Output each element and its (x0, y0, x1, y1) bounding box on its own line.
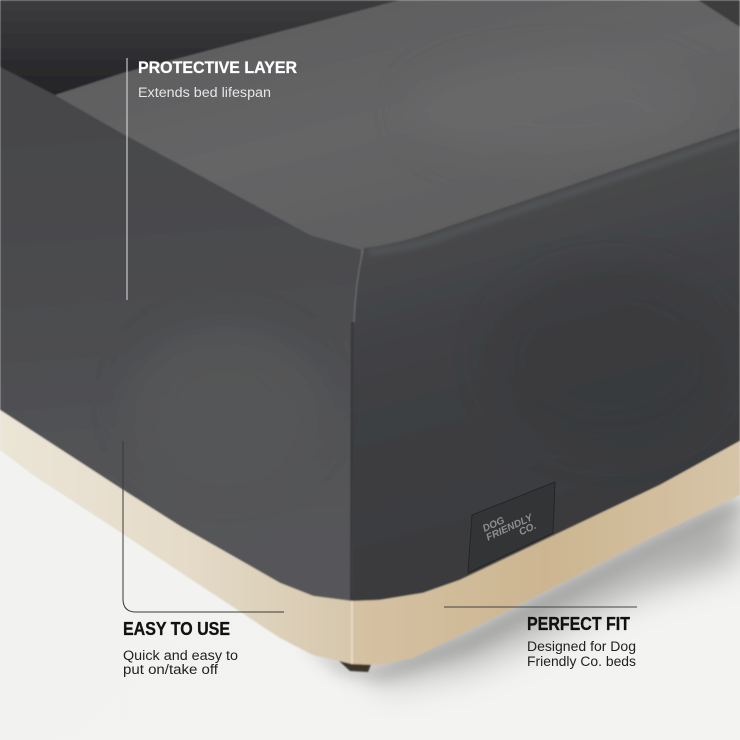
text: extends bed lifespan: Extends bed lifespan (138, 85, 271, 100)
callout line: protective layer (126, 58, 128, 300)
label text: CO. (517, 521, 538, 538)
label text: FRIENDLY (485, 512, 536, 544)
callout line: easy to use (123, 441, 284, 612)
left wall face (0, 67, 362, 602)
back wall (0, 0, 410, 96)
text: quick and easy: put on/take off (123, 662, 218, 677)
callout line: perfect fit (444, 606, 637, 608)
floor shadow near edge (300, 497, 740, 680)
heading: protective layer: PROTECTIVE LAYER (138, 58, 297, 77)
floor shadow right (370, 492, 740, 682)
text: quick and easy (123, 648, 238, 677)
tan corner seam (351, 601, 353, 664)
tan band right (352, 441, 740, 665)
tan band left (0, 410, 352, 664)
back right wall (698, 0, 740, 27)
wall ridge highlight (368, 136, 740, 252)
product label (468, 482, 555, 573)
label text (481, 503, 540, 552)
heading: perfect fit: PERFECT FIT (527, 614, 630, 634)
foot (338, 660, 372, 672)
cushion bright patch (410, 55, 710, 165)
text: designed for: Designed for Dog (527, 639, 636, 654)
seam lower (351, 322, 352, 600)
darker right face mid (490, 270, 730, 450)
heading: easy to use: EASY TO USE (123, 619, 230, 639)
corner seam (354, 250, 363, 322)
text: quick and easy: Quick and easy to (123, 648, 238, 663)
label text: DOG (481, 515, 507, 535)
text: designed for: Friendly Co. beds (527, 654, 636, 669)
right wall face (352, 128, 740, 602)
cushion (55, 0, 740, 252)
text: designed for (527, 639, 636, 669)
light mottling on left face (130, 325, 320, 485)
